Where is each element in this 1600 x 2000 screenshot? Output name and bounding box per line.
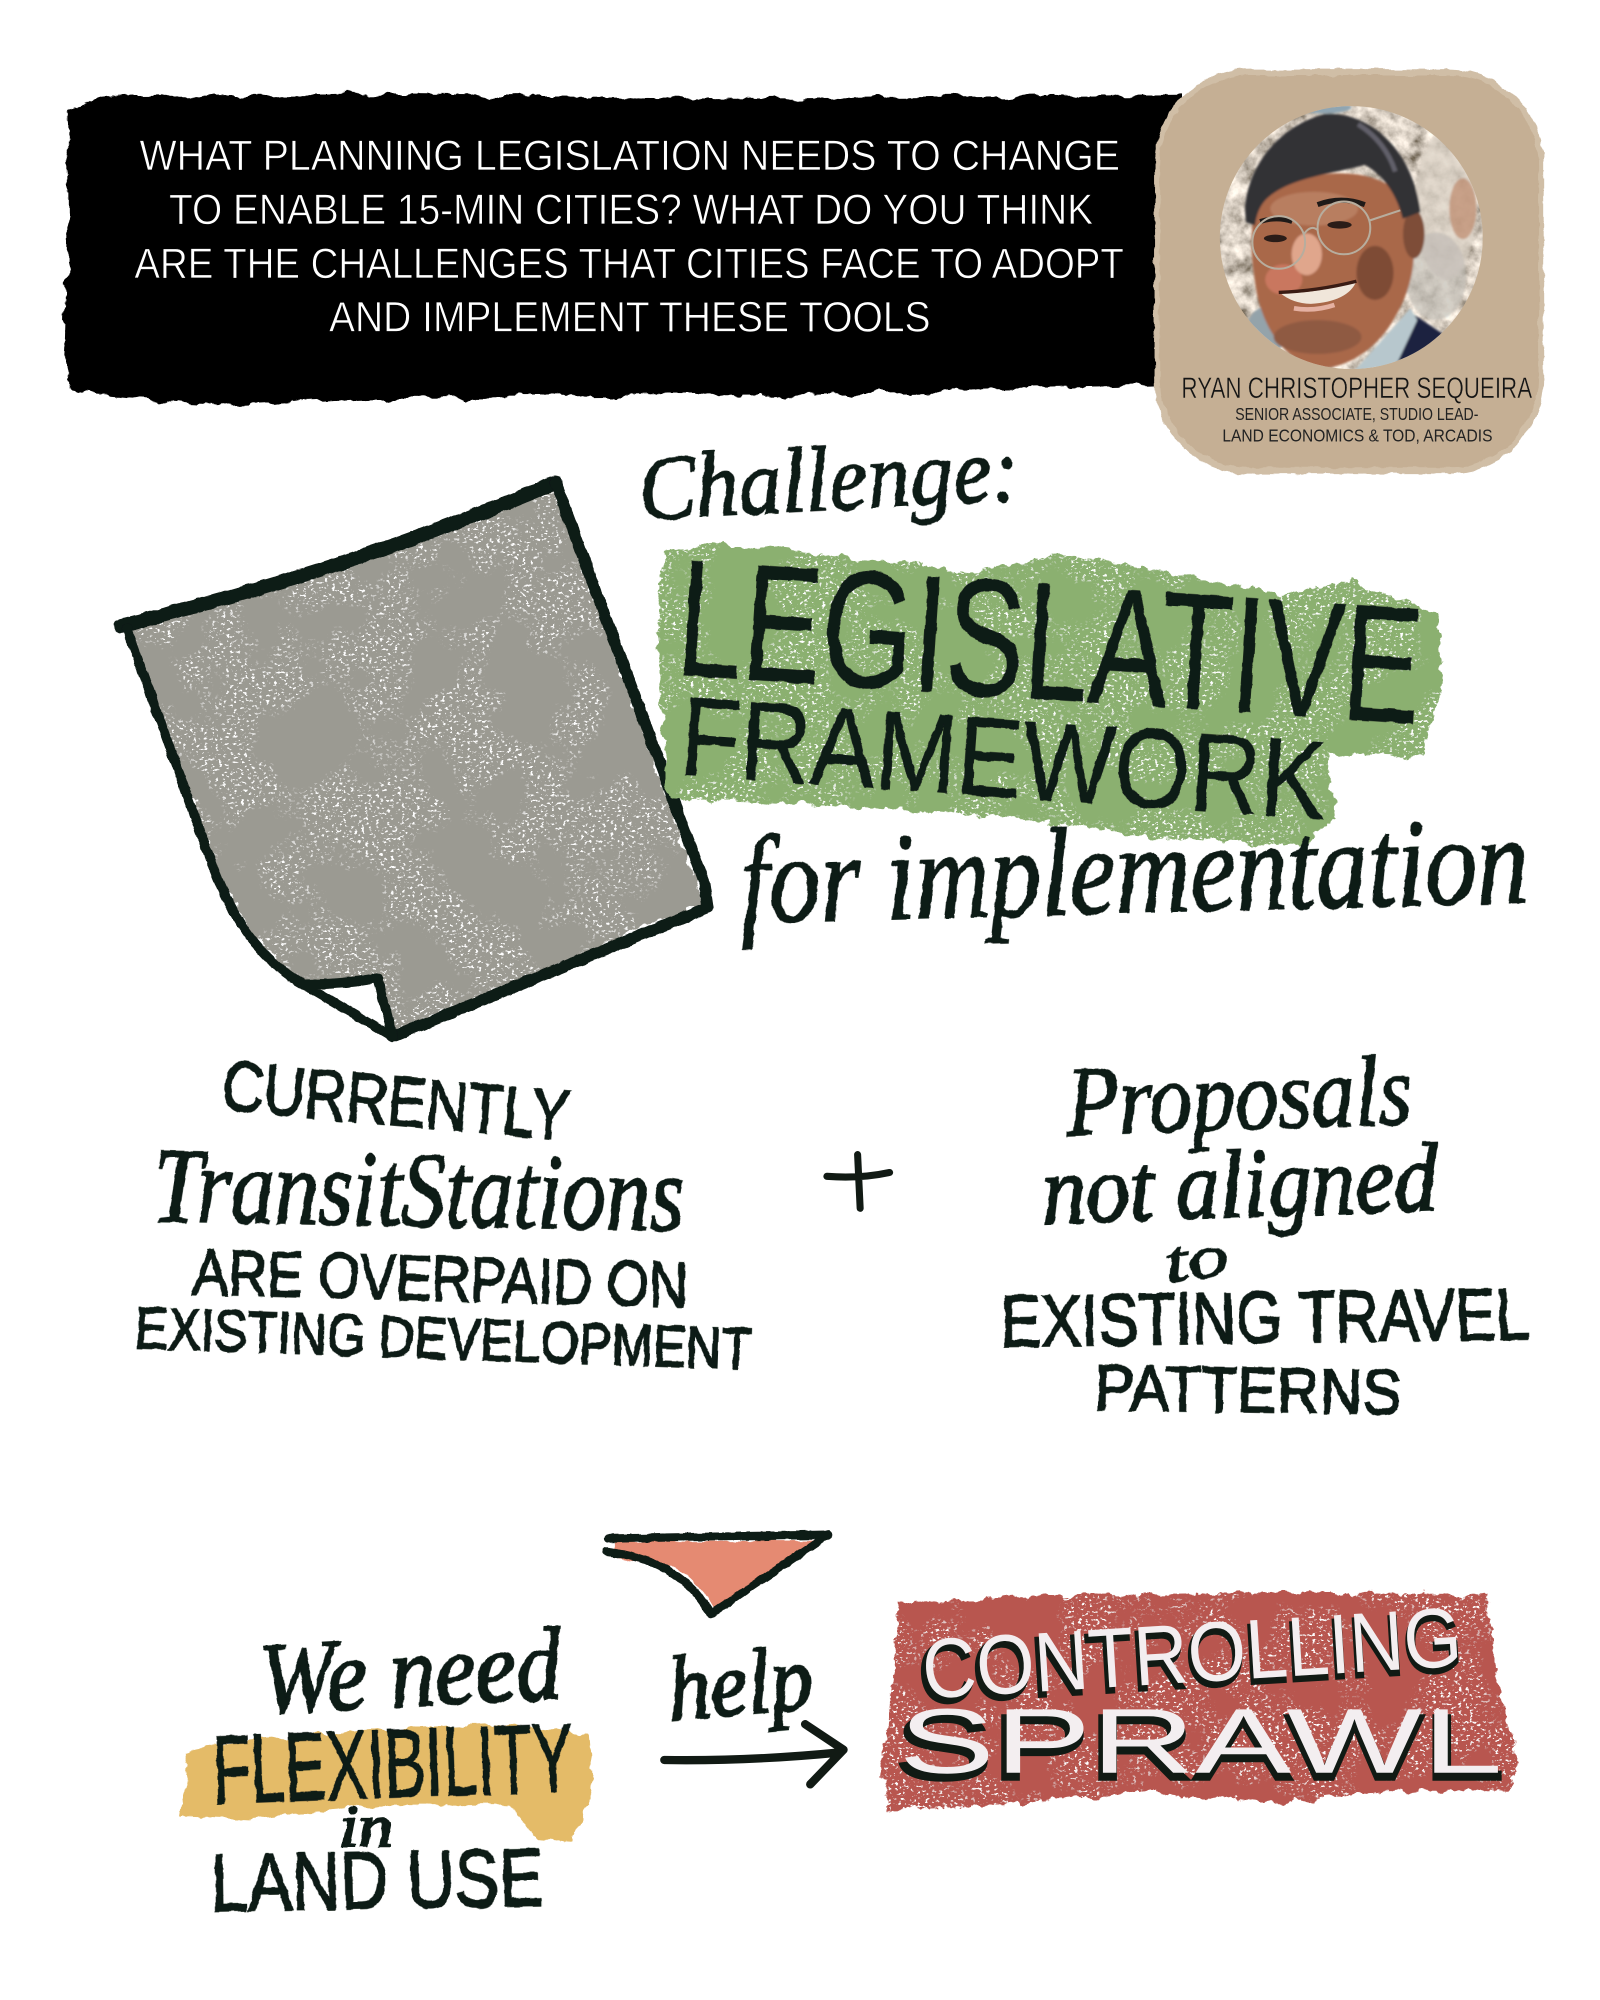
text block: flexibility bbox=[180, 1608, 593, 1929]
icon: plus bbox=[827, 1155, 890, 1208]
question text bbox=[134, 132, 1124, 341]
text block: transit stations: ARE OVERPAID ON bbox=[192, 1236, 689, 1321]
arrow: coral triangle bbox=[607, 1535, 828, 1614]
text block: flexibility: FLEXIBILITY bbox=[211, 1703, 575, 1825]
glasses bbox=[1252, 202, 1400, 269]
speaker role: SENIOR ASSOCIATE, STUDIO LEAD- bbox=[1235, 404, 1478, 424]
hair bbox=[1245, 114, 1421, 226]
question text: AND IMPLEMENT THESE TOOLS bbox=[329, 294, 931, 341]
icon: curled paper sheet bbox=[120, 483, 708, 1037]
speaker card bbox=[1155, 69, 1544, 474]
nose bbox=[1292, 233, 1322, 275]
controlling text: CONTROLLING bbox=[916, 1595, 1464, 1722]
text block: proposals: PATTERNS bbox=[1094, 1351, 1403, 1429]
yellow highlight bbox=[180, 1722, 593, 1842]
black brush background bbox=[64, 95, 1184, 406]
heading: challenge bbox=[636, 418, 1530, 951]
callout: controlling sprawl bbox=[879, 1590, 1519, 1809]
portrait photo bbox=[1216, 101, 1486, 378]
text block: proposals: to bbox=[1160, 1222, 1233, 1295]
eyebrows and eyes bbox=[1260, 200, 1365, 221]
text block: transit stations: EXISTING DEVELOPMENT bbox=[134, 1296, 753, 1382]
text block: flexibility: in bbox=[339, 1794, 393, 1859]
title line 2: FRAMEWORK bbox=[677, 673, 1330, 843]
sprawl text: SPRAWL bbox=[895, 1696, 1504, 1799]
text block: flexibility: We need bbox=[256, 1608, 565, 1737]
question text: TO ENABLE 15-MIN CITIES? WHAT DO YOU THINK bbox=[169, 186, 1093, 233]
tan rounded card bbox=[1155, 69, 1544, 474]
smile bbox=[1280, 281, 1356, 304]
shirt collar bbox=[1356, 308, 1419, 369]
speaker role bbox=[1222, 404, 1492, 446]
arrow: help: help bbox=[664, 1626, 817, 1740]
text block: transit stations: CURRENTLY bbox=[219, 1046, 573, 1155]
text block: flexibility: LAND USE bbox=[210, 1832, 544, 1929]
face bbox=[1252, 173, 1414, 368]
text block: transit stations bbox=[134, 1046, 753, 1382]
callout: controlling sprawl: SPRAWL bbox=[899, 1690, 1503, 1793]
suit bbox=[1365, 313, 1453, 378]
text block: proposals bbox=[1000, 1034, 1530, 1429]
callout: controlling sprawl: CONTROLLING bbox=[920, 1590, 1464, 1717]
text block: proposals: Proposals bbox=[1064, 1034, 1414, 1157]
arrow: help bbox=[664, 1626, 844, 1784]
text block: transit stations: TransitStations bbox=[152, 1126, 685, 1254]
question banner bbox=[64, 95, 1184, 406]
question text: WHAT PLANNING LEGISLATION NEEDS TO CHANGE bbox=[140, 132, 1120, 179]
text block: proposals: not aligned bbox=[1040, 1124, 1440, 1246]
speaker role: LAND ECONOMICS & TOD, ARCADIS bbox=[1222, 426, 1492, 446]
green highlight bbox=[655, 543, 1443, 846]
question text: ARE THE CHALLENGES THAT CITIES FACE TO ADOPT bbox=[134, 240, 1124, 287]
label: Challenge: Challenge: bbox=[636, 418, 1022, 540]
red panel bbox=[879, 1592, 1519, 1809]
